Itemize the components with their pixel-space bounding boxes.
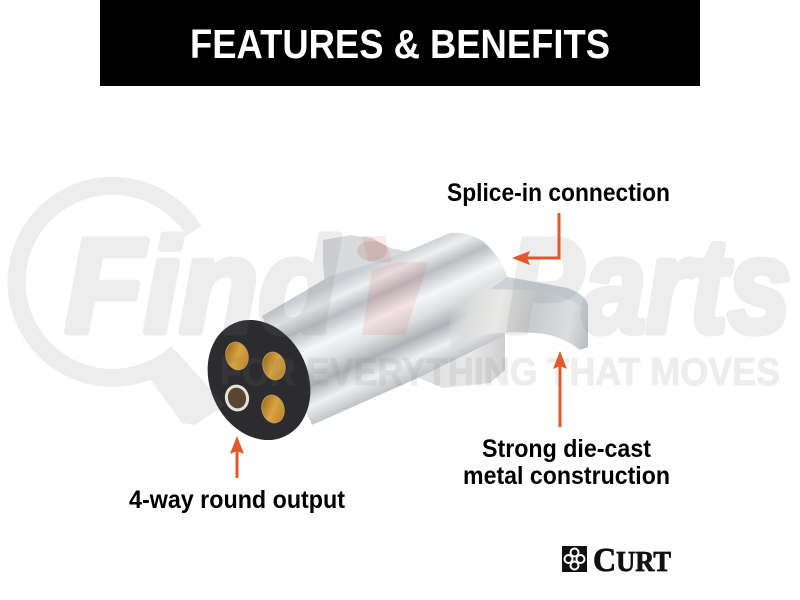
right hook tab xyxy=(450,277,588,350)
title banner: FEATURES & BENEFITS xyxy=(190,21,610,67)
pin: brass top right xyxy=(260,350,288,382)
pin: brass bottom xyxy=(259,393,287,425)
back tab xyxy=(323,235,410,285)
title banner xyxy=(100,0,700,86)
logo emblem xyxy=(562,546,587,572)
lower boss xyxy=(417,333,505,388)
callout: 4-way round output xyxy=(129,436,346,514)
pin: silver socket xyxy=(224,384,250,412)
rubber face xyxy=(189,303,329,457)
magnifier ring xyxy=(17,186,194,378)
arrow xyxy=(553,351,567,427)
magnifier handle xyxy=(145,350,225,425)
callout: 4-way round output: 4-way round output xyxy=(129,486,346,514)
wordmark left: Find xyxy=(65,212,340,361)
pin: brass top left xyxy=(223,340,251,372)
callout: splice-in connection: Splice-in connection xyxy=(447,179,670,207)
product photo: 4-way round connector xyxy=(189,233,588,457)
watermark: red i mark xyxy=(362,236,428,335)
arrow xyxy=(512,213,559,265)
callout: strong die-cast metal construction xyxy=(463,351,670,490)
arrow xyxy=(230,436,244,478)
hook top edge xyxy=(490,277,588,306)
cylinder body xyxy=(262,233,507,425)
tab hole xyxy=(357,241,387,261)
watermark: FindItParts logo xyxy=(17,186,791,425)
callout: strong die-cast metal construction: Strong die-cast xyxy=(482,435,652,463)
CURT logo xyxy=(562,542,671,579)
callout: strong die-cast metal construction: metal construction xyxy=(463,462,670,490)
logo wordmark: CURT xyxy=(593,542,671,579)
callout: splice-in connection xyxy=(447,179,670,265)
